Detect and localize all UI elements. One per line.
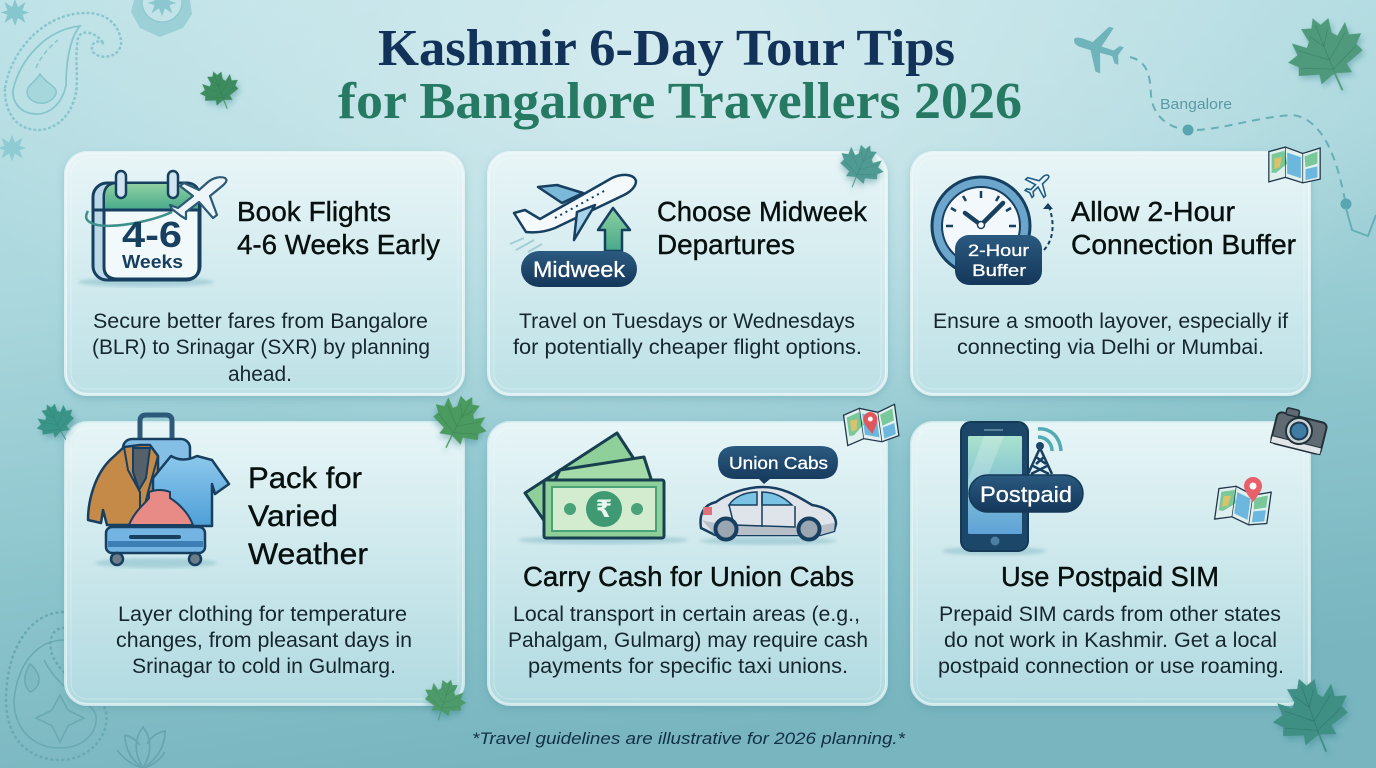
- route stop 2: [1340, 198, 1352, 210]
- route dashed path: [1130, 57, 1345, 200]
- description: postpaid connection or use roaming.: [938, 655, 1284, 678]
- icon: plane and midweek badge: Midweek: [533, 257, 626, 282]
- leaf card 4 bottom right: [417, 673, 472, 727]
- route stop: [1182, 124, 1194, 136]
- description: Prepaid SIM cards from other states: [939, 603, 1281, 626]
- icon: plane and midweek badge: [510, 175, 637, 287]
- card 4: pack: [66, 415, 464, 704]
- route plane: [1073, 20, 1130, 78]
- card background: [488, 422, 886, 704]
- heading: [237, 196, 440, 260]
- card 1: book flights: [66, 152, 464, 394]
- icon: rupee notes: [518, 433, 688, 544]
- card 3: connection buffer: [912, 147, 1320, 394]
- flight route: [1073, 20, 1376, 236]
- description: Layer clothing for temperature: [118, 603, 407, 626]
- card background: [488, 152, 886, 394]
- leaf top right: [1276, 4, 1376, 105]
- description: [938, 603, 1284, 678]
- description: Pahalgam, Gulmarg) may require cash: [508, 629, 868, 652]
- heading: [1071, 196, 1296, 260]
- leaf bottom right: [1262, 665, 1362, 765]
- map with pin: [1215, 477, 1271, 527]
- heading: Weather: [248, 538, 368, 571]
- icon: clock with buffer badge: 2-Hour: [968, 241, 1029, 260]
- heading: Pack for: [248, 462, 362, 495]
- description: Ensure a smooth layover, especially if: [933, 310, 1288, 333]
- icon: phone with postpaid badge: [942, 422, 1083, 556]
- card 6: SIM: [912, 406, 1329, 704]
- description: connecting via Delhi or Mumbai.: [957, 336, 1264, 359]
- heading: Connection Buffer: [1071, 229, 1296, 260]
- camera sticker: [1270, 406, 1329, 455]
- leaf left of card 4: [29, 395, 83, 449]
- map sticker: [1269, 147, 1320, 183]
- icon: phone with postpaid badge: Postpaid: [980, 482, 1072, 507]
- card 5: cash: [488, 403, 899, 704]
- heading: Departures: [657, 229, 795, 260]
- decorative flower left: [0, 134, 26, 162]
- description: ahead.: [228, 363, 292, 386]
- title line 1: Kashmir 6-Day Tour Tips: [378, 20, 955, 77]
- leaf: [831, 136, 891, 196]
- decorative paisley bottom-left: [6, 612, 107, 760]
- card background: [912, 422, 1310, 704]
- title line 2: for Bangalore Travellers 2026: [338, 73, 1022, 130]
- route tail lines: [1346, 208, 1376, 236]
- description: for potentially cheaper flight options.: [513, 336, 862, 359]
- description: Srinagar to cold in Gulmarg.: [132, 655, 396, 678]
- leaf card 4 top right: [420, 384, 498, 461]
- decorative lotus bottom: [117, 727, 165, 768]
- title: [338, 20, 1022, 130]
- heading: [248, 462, 368, 571]
- footer note: *Travel guidelines are illustrative for 2026 planning.*: [472, 729, 907, 748]
- card background: [912, 152, 1310, 394]
- map sticker: [843, 403, 899, 447]
- icon: clock with buffer badge: Buffer: [972, 261, 1026, 280]
- decorative paisley top-left: [5, 13, 121, 130]
- description: do not work in Kashmir. Get a local: [944, 629, 1277, 652]
- description: [513, 310, 862, 359]
- icon: calendar: 4-6: [122, 214, 182, 255]
- icon: calendar: Weeks: [122, 252, 183, 272]
- icon: clock with buffer badge: [932, 175, 1053, 285]
- decorative flower top-left: [1, 0, 29, 26]
- description: Local transport in certain areas (e.g.,: [513, 603, 860, 626]
- heading: Carry Cash for Union Cabs: [523, 561, 854, 592]
- description: payments for specific taxi unions.: [528, 655, 848, 678]
- route label: Bangalore: [1160, 97, 1232, 113]
- description: [92, 310, 430, 386]
- description: changes, from pleasant days in: [116, 629, 412, 652]
- heading: [657, 196, 868, 260]
- decorative mandala top: [131, 0, 192, 37]
- heading: Choose Midweek: [657, 196, 868, 227]
- heading: Varied: [248, 500, 338, 533]
- heading: 4-6 Weeks Early: [237, 229, 440, 260]
- icon: car with speech bubble: Union Cabs: [729, 453, 828, 473]
- card 2: midweek: [488, 136, 891, 394]
- description: Secure better fares from Bangalore: [93, 310, 428, 333]
- description: (BLR) to Srinagar (SXR) by planning: [92, 336, 430, 359]
- icon: car with speech bubble: [700, 446, 838, 545]
- description: [933, 310, 1288, 359]
- description: [116, 603, 412, 678]
- leaf top left: [194, 65, 246, 116]
- description: [508, 603, 868, 678]
- heading: Book Flights: [237, 196, 391, 227]
- description: Travel on Tuesdays or Wednesdays: [519, 310, 855, 333]
- heading: Allow 2-Hour: [1071, 196, 1235, 227]
- icon: calendar: [78, 171, 226, 287]
- icon: suitcase and clothes: [88, 415, 229, 568]
- heading: Use Postpaid SIM: [1001, 561, 1219, 592]
- card background: [66, 152, 464, 394]
- icon: rupee notes: ₹: [596, 495, 612, 523]
- card background: [66, 422, 464, 704]
